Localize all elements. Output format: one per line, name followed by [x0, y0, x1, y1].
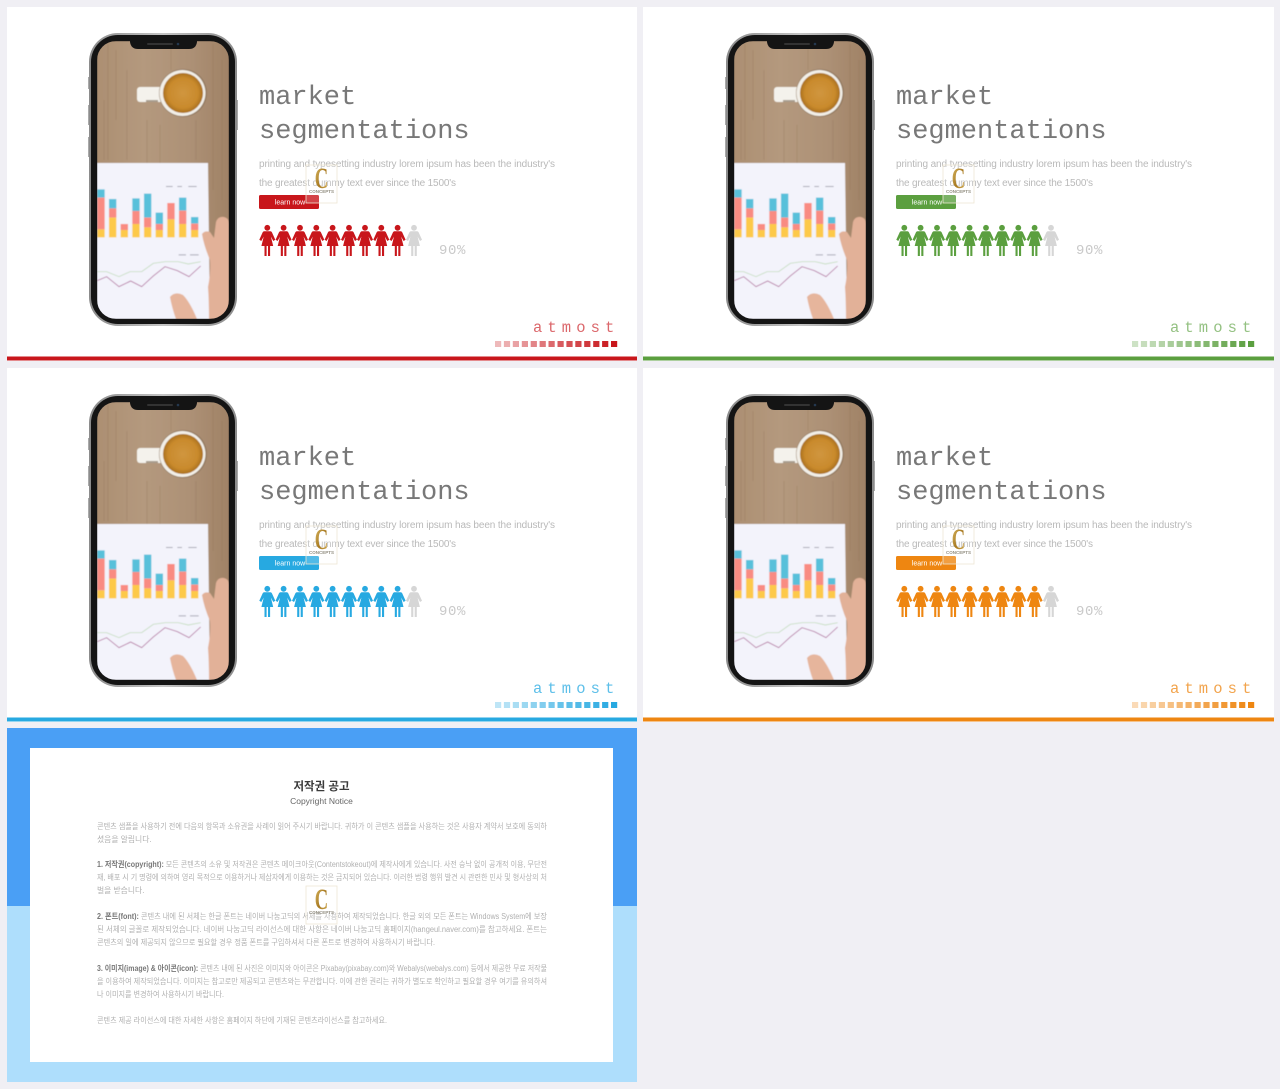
notice footer: 콘텐츠 제공 라이선스에 대한 자세한 사항은 홈페이지 하단에 기재된 콘텐츠라이선스를 참고하세요. — [97, 1015, 387, 1025]
body text: printing and typesetting industry lorem ipsum has been the industry's — [896, 159, 1192, 170]
notice intro — [97, 821, 547, 844]
colour squares — [1132, 341, 1254, 347]
accent bar — [643, 718, 1274, 722]
phone mockup — [725, 394, 875, 687]
panel: orange slide — [643, 368, 1274, 722]
watermark: notice — [306, 884, 337, 924]
heading: segmentations — [259, 478, 470, 508]
notice clause 3: image and icon: 3. 이미지(image) & 아이콘(icon): 콘텐츠 내에 된 사진은 이미지와 아이콘은 Pixabay(pixabay.com)와 Webalys(webalys.com) 등에서 제공한 무료 저작물 — [97, 963, 547, 973]
notice clause 1: copyright — [97, 859, 547, 895]
notice clause 3: image and icon: 을 이용하여 제작되었습니다. 이미지는 참고로만 제공되고 콘텐츠와는 무관합니다. 이에 관한 권리는 귀하가 별도로 확인하고 필요할 경우 여기를 유의하셔 — [97, 976, 547, 986]
watermark: slide 3: CONCEPTS — [309, 550, 334, 555]
brand name: atmost — [1170, 319, 1256, 337]
watermark: slide 4: CONCEPTS — [946, 550, 971, 555]
button: learn now: learn now — [912, 560, 943, 568]
button: learn now: learn now — [275, 560, 306, 568]
watermark: slide 3: C — [315, 524, 328, 556]
watermark: slide 2 — [943, 163, 974, 203]
button: learn now — [259, 556, 319, 570]
watermark: slide 1 — [306, 163, 337, 203]
colour squares — [1132, 702, 1254, 708]
body text: the greatest dummy text ever since the 1500's — [259, 178, 456, 189]
button: learn now — [896, 195, 956, 209]
watermark: slide 2: CONCEPTS — [946, 189, 971, 194]
accent bar — [7, 356, 637, 360]
body text: the greatest dummy text ever since the 1500's — [896, 178, 1093, 189]
button: learn now — [896, 556, 956, 570]
watermark: slide 1: C — [315, 163, 328, 195]
pictogram: 9 of 10 people — [259, 225, 422, 256]
button: learn now — [259, 195, 319, 209]
body text: the greatest dummy text ever since the 1500's — [259, 539, 456, 550]
notice clause 2: font — [97, 911, 547, 947]
heading: market — [259, 444, 356, 474]
percentage: 90% — [439, 243, 466, 259]
notice intro: 콘텐츠 샘플을 사용하기 전에 다음의 항목과 소유권을 사례이 읽어 주시기 바랍니다. 귀하가 이 콘텐츠 샘플을 사용하는 것은 사용자 계약서 보호에 동의하 — [97, 821, 547, 831]
notice clause 3: image and icon: 나 이미지를 변경하여 사용하시기 바랍니다. — [97, 989, 224, 999]
colour squares — [495, 341, 617, 347]
panel: red slide — [7, 7, 637, 361]
brand name: atmost — [533, 680, 619, 698]
watermark: slide 4: C — [952, 524, 965, 556]
panel: green slide — [643, 7, 1274, 361]
phone mockup — [725, 33, 875, 326]
notice clause 3: image and icon — [97, 963, 547, 999]
heading: market — [259, 83, 356, 113]
notice clause 1: copyright: 벌을 받습니다. — [97, 885, 144, 895]
pictogram: 9 of 10 people — [896, 586, 1059, 617]
body text: the greatest dummy text ever since the 1500's — [896, 539, 1093, 550]
notice clause 2: font: 콘텐츠의 일에 제공되지 않으므로 필요할 경우 정품 폰트를 구입하셔서 다른 폰트로 변경하여 사용하시기 바랍니다. — [97, 937, 435, 947]
notice title: 저작권 공고 — [293, 779, 350, 793]
watermark: notice: CONCEPTS — [309, 910, 334, 915]
body text: printing and typesetting industry lorem ipsum has been the industry's — [896, 520, 1192, 531]
watermark: slide 4 — [943, 524, 974, 564]
button: learn now: learn now — [912, 200, 943, 206]
body text: printing and typesetting industry lorem ipsum has been the industry's — [259, 159, 555, 170]
watermark: slide 3 — [306, 524, 337, 564]
button: learn now: learn now — [275, 200, 306, 206]
heading: market — [896, 83, 993, 113]
percentage: 90% — [1076, 243, 1103, 259]
heading: segmentations — [259, 117, 470, 147]
accent bar — [7, 718, 637, 722]
notice subtitle: Copyright Notice — [290, 796, 353, 806]
percentage: 90% — [1076, 604, 1103, 620]
pictogram: 9 of 10 people — [259, 586, 422, 617]
pictogram: 9 of 10 people — [896, 225, 1059, 256]
brand name: atmost — [1170, 680, 1256, 698]
phone mockup — [88, 33, 238, 326]
accent bar — [643, 356, 1274, 360]
notice clause 1: copyright: 재, 배포 시 기 명령에 의하여 영리 목적으로 이용하거나 제삼자에게 이용하는 것은 금지되어 있습니다. 이러한 법령 행위 발견 시 관련한 민사 및 형사상의 처 — [97, 872, 547, 882]
percentage: 90% — [439, 604, 466, 620]
watermark: slide 1: CONCEPTS — [309, 189, 334, 194]
body text: printing and typesetting industry lorem ipsum has been the industry's — [259, 520, 555, 531]
notice clause 1: copyright: 1. 저작권(copyright): 모든 콘텐츠의 소유 및 저작권은 콘텐츠 메이크아웃(Contentstokeout)에 제작사에게 있습니다. 사전 승낙 없이 공개적 이용, 무단전 — [97, 859, 547, 869]
heading: market — [896, 444, 993, 474]
watermark: slide 2: C — [952, 163, 965, 195]
brand name: atmost — [533, 319, 619, 337]
watermark: notice: C — [315, 884, 328, 916]
heading: segmentations — [896, 117, 1107, 147]
panel: copyright notice — [7, 728, 637, 1082]
phone mockup — [88, 394, 238, 687]
notice clause 2: font: 2. 폰트(font): 콘텐츠 내에 된 서체는 한글 폰트는 네이버 나눔고딕의 서체를 사용하여 제작되었습니다. 한글 외의 모든 폰트는 Windows System에 보장 — [97, 911, 547, 921]
colour squares — [495, 702, 617, 708]
heading: segmentations — [896, 478, 1107, 508]
panel: blue slide — [7, 368, 637, 722]
notice intro: 셨음을 알립니다. — [97, 834, 152, 844]
notice clause 2: font: 된 서체의 글꼴로 제작되었습니다. 네이버 나눔고딕 라이선스에 대한 사항은 네이버 나눔고딕 홈페이지(hangeul.naver.com)를 참고하세요. 폰트는 — [97, 924, 547, 934]
